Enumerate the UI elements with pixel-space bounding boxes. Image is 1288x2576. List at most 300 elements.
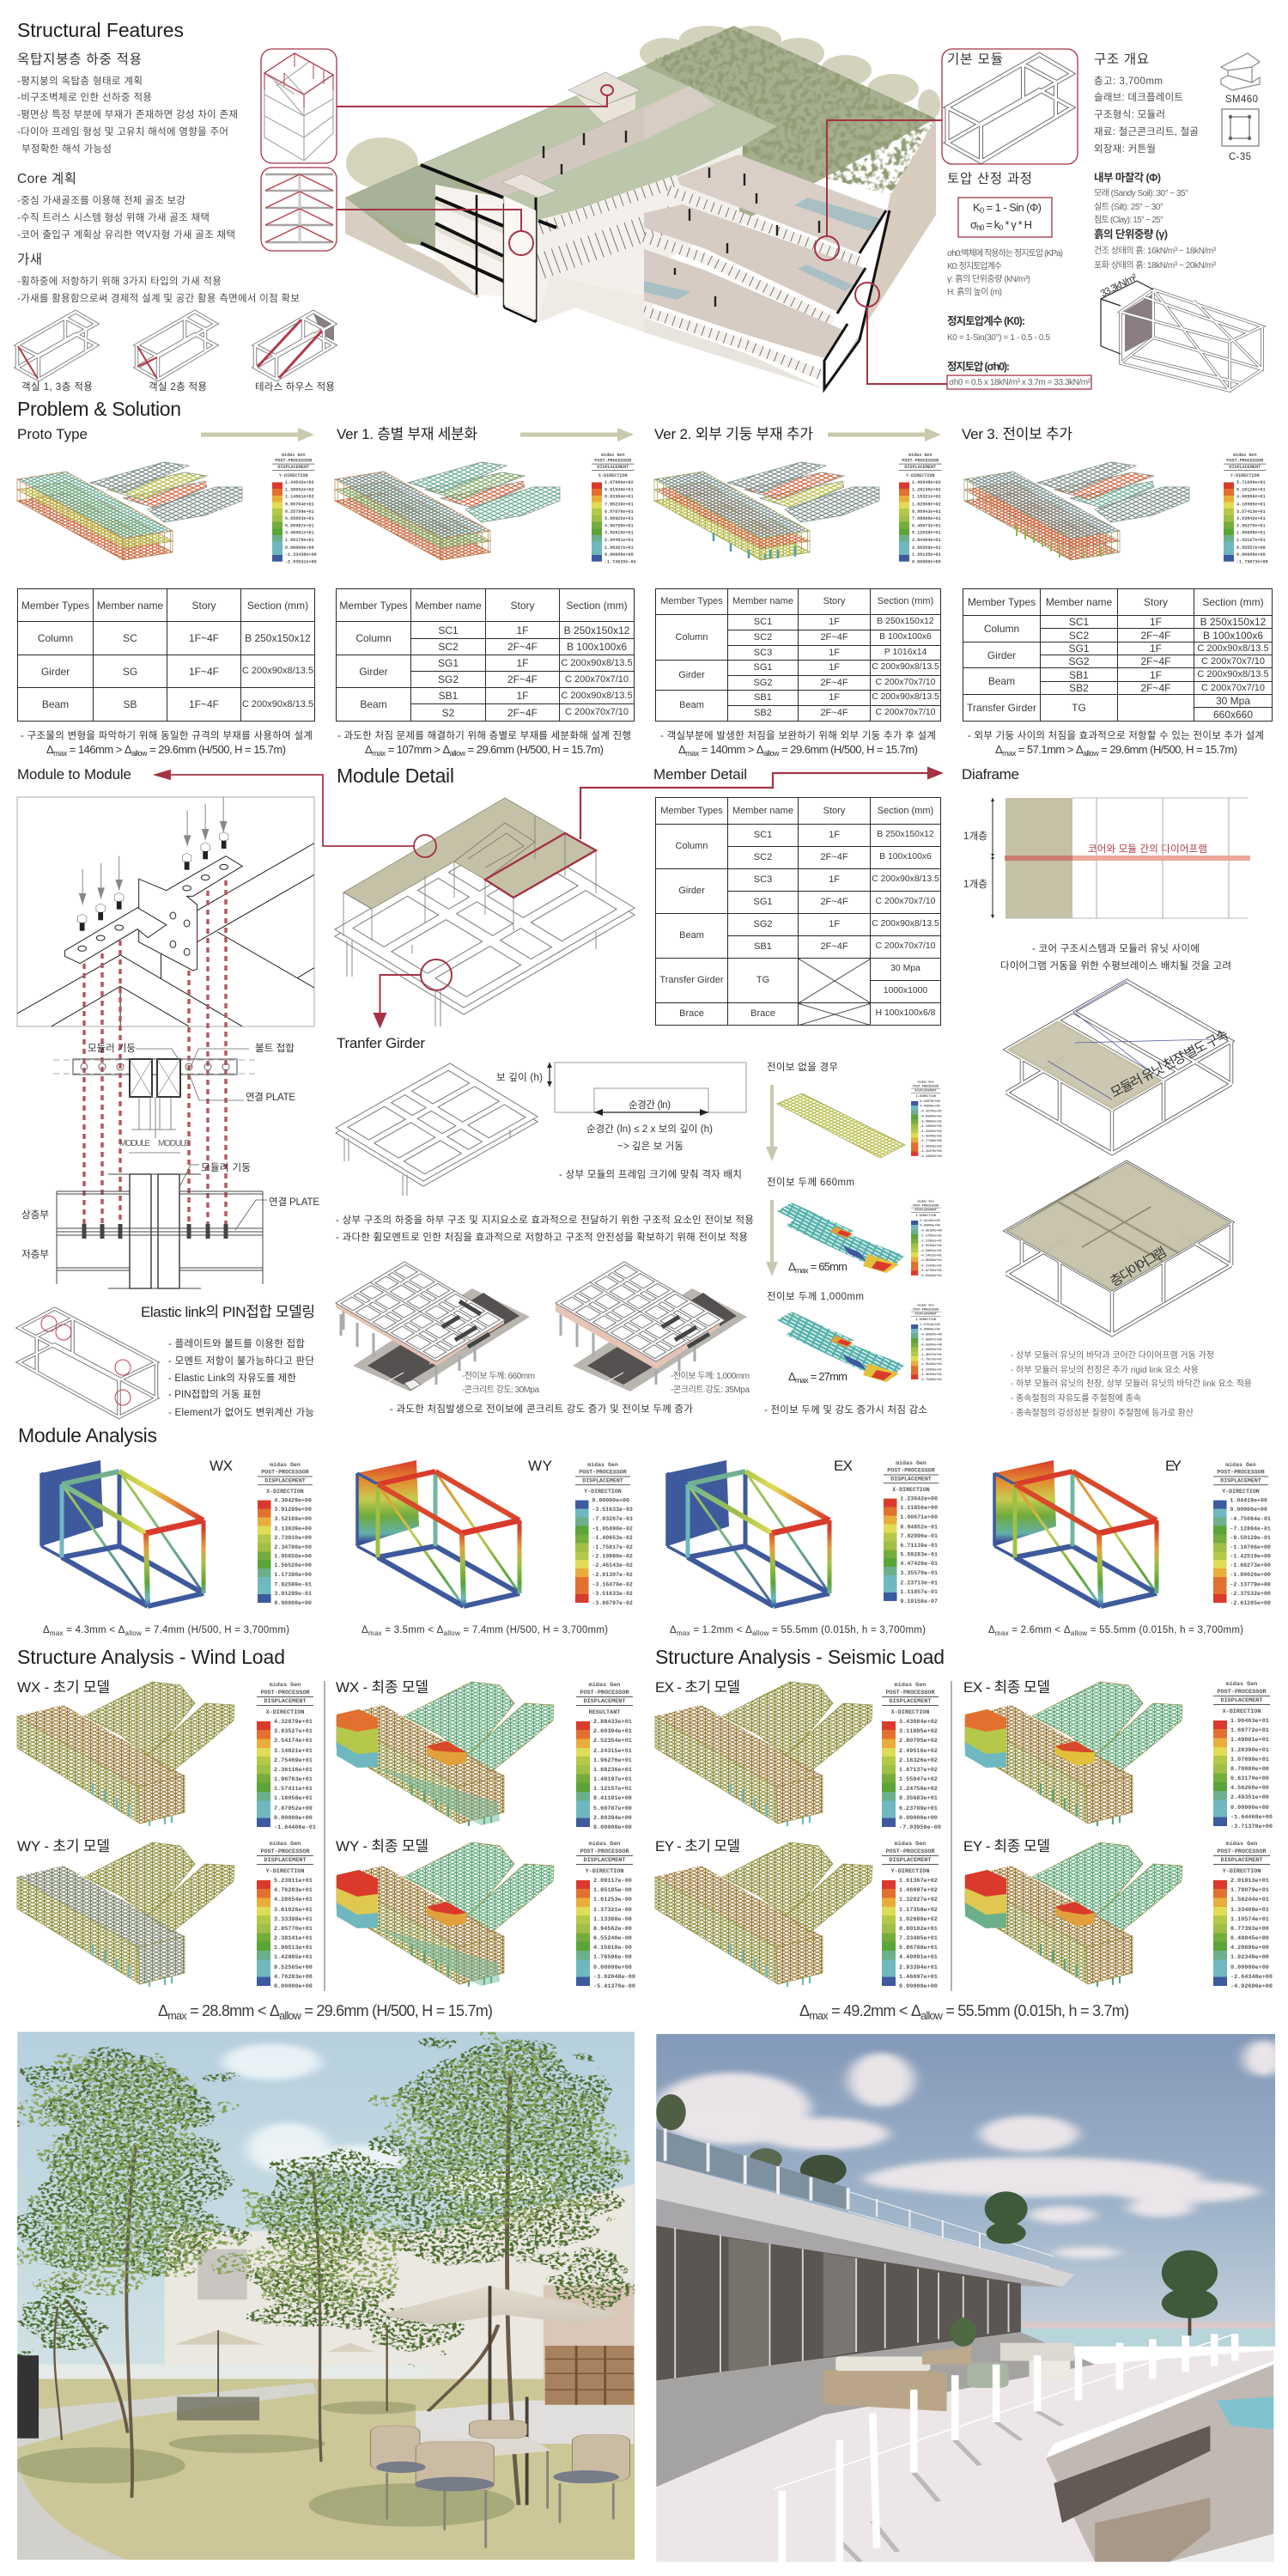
pools: [794, 198, 882, 231]
icon: SM460 H-beam: [1221, 53, 1260, 105]
legend: EY module: -1.66273e+00: [1230, 1563, 1271, 1569]
legend: 660mm girder: -3.04552e+01: [920, 1249, 942, 1252]
hillside: [345, 26, 936, 249]
captions: bracing types: 테라스 하우스 적용: [255, 381, 335, 393]
legend: 660mm girder: -1.17592e+01: [920, 1234, 942, 1238]
table: member detail: Member Types: [660, 806, 723, 816]
table: member detail: SC3: [754, 874, 772, 885]
captions: module analysis: = 7.4mm (H/500, H = 3,700mm): [460, 1625, 608, 1635]
legend: EX initial: 1.24758e+02: [899, 1786, 938, 1793]
captions: module analysis: max: [50, 1629, 64, 1637]
legend: WX initial: 0.00000e+00: [274, 1815, 313, 1822]
table note: version 2: max: [685, 749, 700, 758]
panel: transfer girder analysis: 전이보 두께 660mm: [767, 1177, 854, 1188]
legend: version 1: 2.94461e+01: [605, 538, 634, 543]
table: proto type members: Column: [38, 632, 73, 644]
section: design versions headings and arrows: Proto Type: [17, 426, 88, 442]
table: version 1 members: Girder: [359, 665, 388, 677]
table: version 3 members: 30 Mpa: [1216, 695, 1250, 707]
legend: EX module: 3.35570e-01: [900, 1570, 938, 1577]
legend: 1000mm girder: -9.55394e+00: [920, 1343, 942, 1347]
legend: version 1: midas Gen: [601, 453, 625, 458]
legend: EY initial: 4.40091e+01: [899, 1954, 938, 1961]
heading: transfer girder: Tranfer Girder: [337, 1035, 425, 1051]
table: proto type members: SG: [123, 665, 137, 677]
text block: rooftop load: -평면상 특정 부분에 부재가 존재하면 강성 차이 존재: [17, 108, 238, 120]
legend: EY final: 1.10574e+01: [1230, 1916, 1269, 1923]
legend: version 2: 1.28135e+02: [912, 488, 941, 493]
callout lines: [337, 85, 947, 384]
heading: Diaframe: Diaframe: [962, 766, 1019, 783]
arrow: to member detail and diaframe: [580, 768, 941, 839]
arrow: to transfer girder: [374, 959, 452, 1026]
model: EX initial: [655, 1682, 872, 1826]
table: version 2 members: 1F: [829, 662, 840, 673]
legend: EX module: 8.94852e-01: [900, 1524, 938, 1531]
legend: 660mm girder: Z-DIRECTION: [915, 1215, 936, 1218]
plan detail: plate connection: 볼트 접합: [255, 1043, 295, 1054]
text block: diaphragm assumptions: - 종속절점의 강성성분 질량이 주절점에 등가로 환산: [1011, 1407, 1194, 1418]
legend: WX module: 7.82599e-01: [274, 1581, 312, 1588]
table: proto type members: B 250x150x12: [245, 632, 311, 644]
window bands: [541, 180, 860, 266]
table: proto type members: Section (mm): [247, 600, 308, 612]
legend: EY initial: 5.86788e+01: [899, 1945, 938, 1952]
legend: version 2: midas Gen: [908, 453, 933, 458]
legend: EX module: 6.71139e-01: [900, 1543, 938, 1550]
legend: no transfer girder: 8.46079e+00: [920, 1099, 940, 1104]
captions: bracing types: 객실 1, 3층 적용: [21, 381, 93, 393]
legend: 1000mm girder: -2.45394e+01: [920, 1373, 942, 1377]
legend: WY final: DISPLACEMENT: [584, 1857, 625, 1864]
legend: 660mm girder: [911, 1200, 942, 1277]
table: version 1 members: SC2: [438, 641, 459, 653]
frame model: EY: [994, 1460, 1157, 1606]
table: member detail: SB1: [754, 941, 772, 952]
legend: EX module: POST-PROCESSOR: [887, 1468, 935, 1474]
legend: EX initial: X-DIRECTION: [891, 1709, 929, 1716]
text block: rooftop load: -평지붕의 옥탑층 형태로 계획: [17, 76, 143, 87]
terrace 2: [644, 204, 864, 312]
separators: [325, 1681, 951, 1991]
plan detail: plate connection: MODULE: [119, 1139, 150, 1148]
legend: EY final: -2.64348e+00: [1230, 1974, 1273, 1981]
legend: version 1: 8.83304e+01: [605, 495, 634, 500]
table: member detail: B 250x150x12: [877, 830, 934, 839]
captions: module analysis: allow: [125, 1629, 142, 1637]
panel: core bracing detail: [261, 167, 337, 251]
table: version 3 members: C 200x90x8/13.5: [1197, 669, 1269, 679]
legend: EY initial: 8.80182e+01: [899, 1926, 938, 1933]
drawing: transfer girder over road 660mm: [336, 1262, 539, 1395]
legend: EY initial: 1.61367e+02: [899, 1878, 938, 1885]
text block: rooftop load: [17, 52, 238, 155]
table: member detail: H 100x100x6/8: [876, 1008, 935, 1018]
legend: EX initial: [882, 1682, 941, 1831]
legend: version 1: 1.96307e+01: [605, 545, 634, 551]
table: version 3 members: SG2: [1068, 655, 1089, 667]
plan detail: plate connection: MODULE: [158, 1139, 190, 1148]
legend: EY initial: Y-DIRECTION: [891, 1868, 929, 1875]
case labels: WX: [210, 1458, 233, 1474]
legend: EY module: -2.37532e+00: [1230, 1591, 1271, 1598]
table note: version 3: Δ: [995, 743, 1003, 756]
roof notch terrace: [644, 86, 716, 140]
table: version 2 members: 2F~4F: [820, 708, 848, 718]
legend: WX initial: 2.75469e+01: [274, 1757, 313, 1764]
legend: no transfer girder: -1.55498e+02: [920, 1135, 942, 1138]
FEA model: version 3: [964, 462, 1189, 560]
drawing: transfer girder grid: [336, 1063, 538, 1196]
legend: version 2: 6.40673e+01: [912, 524, 941, 529]
legend: EY initial: 1.32027e+02: [899, 1897, 938, 1903]
text block: rooftop load: 부정확한 해석 가능성: [21, 143, 112, 155]
legend: EX final: X-DIRECTION: [1223, 1708, 1261, 1715]
table: version 1 members: [336, 588, 635, 722]
table: version 3 members: SC2: [1069, 629, 1089, 641]
legend: WX final: DISPLACEMENT: [584, 1698, 625, 1705]
table note: version 2: - 객실부분에 발생한 처짐을 보완하기 위해 외부 기둥 추가 후 설계: [660, 729, 936, 741]
table: version 3 members: 2F~4F: [1140, 682, 1171, 694]
heading: seismic load: Structure Analysis - Seismic Load: [655, 1646, 945, 1668]
icon: C-35 column: C-35: [1229, 152, 1251, 162]
legend: no transfer girder: -1.33203e+02: [920, 1130, 942, 1133]
model: WY final: [337, 1842, 554, 1987]
table note: proto type: - 구조물의 변형을 파악하기 위해 동일한 규격의 부재를 사용하여 설계: [21, 729, 313, 741]
legend: proto type: -2.93541e+00: [285, 559, 317, 564]
case labels: EX: [834, 1458, 853, 1474]
text block: elastic link notes: - 모멘트 저항이 불가능하다고 판단: [168, 1355, 314, 1367]
legend: EX final: 1.49081e+01: [1230, 1737, 1269, 1744]
table: version 1 members: 1F: [516, 657, 529, 669]
table: version 1 members: 2F~4F: [507, 641, 538, 653]
captions: module analysis: allow: [444, 1629, 460, 1637]
text block: structure overview: 층고: 3,700mm: [1094, 76, 1163, 87]
table: member detail: C 200x90x8/13.5: [872, 919, 939, 929]
legend: EY module: [1213, 1462, 1271, 1607]
table: member detail: Brace: [750, 1008, 775, 1019]
panel: basic module: [942, 49, 1078, 164]
section: design versions headings and arrows: [17, 426, 1072, 442]
legend: WX initial: 1.57411e+01: [274, 1786, 313, 1793]
table: proto type members: Member Types: [21, 600, 89, 612]
table: version 3 members: 660x660: [1213, 708, 1253, 720]
text block: friction angle: 건조 상태의 흙: 16kN/m³ ~ 18kN/m³: [1094, 245, 1217, 256]
table: proto type members: SB: [123, 698, 137, 710]
legend: EY final: 1.56244e+01: [1230, 1897, 1269, 1903]
table: version 3 members: SB1: [1069, 668, 1089, 680]
model titles: WY - 최종 모델: [336, 1838, 428, 1854]
table: version 1 members: C 200x70x7/10: [565, 707, 629, 717]
section: design versions headings and arrows: Ver 1. 층별 부재 세분화: [337, 426, 477, 442]
legend: version 1: 3.92615e+01: [605, 531, 634, 536]
legend: WX initial: 3.93527e+01: [274, 1728, 313, 1735]
legend: 660mm girder: -6.50184e+01: [920, 1274, 942, 1277]
captions: module analysis: allow: [752, 1629, 769, 1637]
table note: proto type: Δ: [46, 743, 54, 756]
legend: proto type: [272, 453, 317, 564]
legend: WY initial: POST-PROCESSOR: [260, 1848, 310, 1855]
photo: rooftop terrace render: [654, 2034, 1285, 2562]
legend: EY module: 0.00000e+00: [1230, 1507, 1267, 1513]
legend: version 1: X-DIRECTION: [598, 473, 628, 478]
legend: no transfer girder: Z-DIRECTION: [915, 1095, 936, 1099]
table note: version 3: - 외부 기둥 사이의 처짐을 효과적으로 저항할 수 있는 전이보 추가 설계: [968, 730, 1264, 741]
formula box: 0: [980, 206, 984, 215]
frame model: EX: [667, 1460, 829, 1606]
legend: WX final: 8.41181e+00: [593, 1795, 632, 1802]
legend: EY final: DISPLACEMENT: [1221, 1857, 1262, 1864]
legend: EY module: midas Gen: [1225, 1462, 1256, 1469]
plan detail: plate connection: 모듈러 기둥: [88, 1043, 136, 1054]
legend: EY initial: [882, 1841, 939, 1990]
right soil: [824, 119, 936, 389]
text block: coefficient: 정지토압 (σh0):: [947, 361, 1010, 373]
text block: rooftop load: -비구조벽체로 인한 선하중 적용: [17, 91, 152, 103]
panel: module to module connection drawing: [17, 797, 314, 1026]
legend: WY final: -5.41370e-00: [593, 1983, 635, 1990]
legend: EY initial: midas Gen: [895, 1841, 926, 1848]
highlighted module: [485, 833, 596, 898]
legend: EX final: 0.00000e+00: [1230, 1805, 1269, 1812]
legend: WX final: 5.60787e+00: [593, 1806, 632, 1812]
text block: friction angle: 점토 (Clay): 15° ~ 25°: [1094, 215, 1163, 225]
table: version 2 members: C 200x90x8/13.5: [872, 662, 939, 672]
legend: proto type: midas Gen: [282, 453, 306, 458]
table: version 2 members: SC3: [754, 648, 772, 658]
legend: WX module: 3.91299e+00: [274, 1507, 312, 1513]
table note: version 1: Δ: [365, 743, 373, 756]
table note: version 2: [660, 729, 936, 758]
model titles: EY - 초기 모델: [655, 1838, 740, 1854]
legend: WX module: 2.34780e+00: [274, 1544, 312, 1551]
legend: WY initial: 5.23911e+01: [274, 1878, 313, 1885]
formula box: K: [973, 201, 981, 214]
case labels: [210, 1458, 1182, 1474]
legend: WY final: 1.13388e-00: [593, 1916, 632, 1923]
text block: rooftop load: -다이아 프레임 형성 및 고유치 해석에 영향을 주어: [17, 126, 228, 137]
table: member detail: 1F: [829, 919, 840, 929]
legend: version 1: 6.87076e+01: [605, 509, 634, 515]
table: version 2 members: C 200x70x7/10: [876, 708, 935, 717]
captions: module analysis: = 55.5mm (0.015h, h = 3,700mm): [769, 1625, 926, 1635]
model: WX final: [337, 1682, 554, 1826]
elevation detail: column connection: 연결 PLATE: [269, 1197, 319, 1208]
table: version 2 members: C 200x90x8/13.5: [872, 692, 939, 702]
legend: WY initial: 0.00000e+00: [274, 1983, 313, 1990]
table note: version 1: = 107mm > Δ: [386, 743, 451, 756]
legend: no transfer girder: -8.68494e+01: [920, 1115, 942, 1118]
legend: proto type: 1.14561e+02: [285, 495, 314, 500]
legend: WX initial: POST-PROCESSOR: [260, 1690, 310, 1696]
text block: formula legend: K0: 정지토압계수: [947, 260, 1002, 271]
table: proto type members: SC: [123, 632, 137, 644]
text block: elastic link notes: - 플레이트와 볼트를 이용한 접합: [168, 1338, 305, 1349]
legend: EX module: 1.00671e+00: [900, 1514, 938, 1521]
table: version 3 members: 1F: [1150, 616, 1162, 628]
legend: WY final: [576, 1841, 635, 1990]
diagram: diaphragm section: [963, 798, 1250, 918]
legend: WY module: -1.05490e-02: [592, 1526, 633, 1532]
table note: version 2: allow: [763, 749, 780, 758]
legend: WX module: 3.91299e-01: [274, 1591, 312, 1598]
caption: wind load: Δ: [158, 2002, 168, 2019]
legend: version 3: 4.66556e+01: [1236, 495, 1266, 500]
legend: version 2: [899, 453, 941, 564]
text block: transfer girder notes: - 과다한 휨모멘트로 인한 처짐을 효과적으로 저항하고 구조적 안전성을 확보하기 위해 전이보 적용: [336, 1231, 748, 1243]
result box: σh0 = 0.5 x 18kN/m³ x 3.7m = 33.3kN/m²: [949, 378, 1091, 387]
legend: version 3: 3.57413e+01: [1236, 509, 1266, 515]
diagram: beam depth: 보 깊이 (h): [496, 1072, 543, 1083]
text block: core plan: -수직 트러스 시스템 형성 위해 가새 골조 채택: [17, 212, 210, 223]
text block: formula legend: σh0:벽체에 작용하는 정지토압 (KPa): [947, 247, 1063, 259]
legend: WY final: 1.85185e-00: [593, 1887, 632, 1894]
captions: module analysis: allow: [1071, 1629, 1087, 1637]
caption: seismic load: = 55.5mm (0.015h, h = 3.7m): [942, 2002, 1129, 2019]
legend: WX final: 2.52354e+01: [593, 1738, 632, 1745]
table: version 1 members: S2: [442, 706, 454, 718]
table: version 1 members: SG1: [438, 657, 459, 669]
legend: version 3: 5.18128e+01: [1236, 488, 1266, 493]
captions: bracing types: [21, 381, 335, 393]
table: version 2 members: SC2: [754, 632, 772, 642]
legend: WX final: 2.80394e+00: [593, 1815, 632, 1822]
legend: WY initial: 1.42885e+01: [274, 1954, 313, 1961]
arrow: to module to module: [155, 770, 436, 857]
legend: EX module: 5.59283e-01: [900, 1552, 938, 1558]
heading: elastic link: Elastic link의 PIN접합 모델링: [141, 1304, 315, 1320]
legend: WX final: 1.68236e+01: [593, 1767, 632, 1774]
section: design versions headings and arrows: Ver 3. 전이보 추가: [962, 426, 1072, 442]
legend: EY module: DISPLACEMENT: [1220, 1477, 1261, 1484]
legend: EX final: midas Gen: [1226, 1681, 1257, 1688]
legend: EY final: Y-DIRECTION: [1223, 1868, 1261, 1875]
legend: EX final: 1.69772e+01: [1230, 1727, 1269, 1734]
legend: EY final: [1213, 1841, 1273, 1990]
table: version 3 members: TG: [1072, 702, 1086, 714]
table: proto type members: C 200x90x8/13.5: [242, 666, 313, 676]
legend: WY module: -3.51633e-02: [592, 1591, 633, 1598]
legend: WX module: DISPLACEMENT: [264, 1477, 306, 1484]
legend: EY module: Y-DIRECTION: [1222, 1489, 1260, 1495]
case labels: WY: [528, 1458, 552, 1474]
table: member detail: 30 Mpa: [890, 964, 920, 973]
table: proto type members: Girder: [41, 665, 70, 677]
legend: 1000mm girder: POST-PROCESSOR: [913, 1308, 939, 1312]
legend: version 3: DISPLACEMENT: [1229, 465, 1261, 470]
table: version 2 members: Section (mm): [878, 596, 933, 606]
table: version 2 members: SG1: [753, 662, 773, 673]
model titles: WY - 초기 모델: [17, 1838, 110, 1854]
text block: elastic link notes: [168, 1338, 314, 1418]
legend: WX final: [576, 1682, 633, 1831]
legend: 1000mm girder: 0.00000e+00: [920, 1328, 940, 1331]
captions: module analysis: = 1.2mm < Δ: [690, 1625, 752, 1635]
text block: formula legend: H: 흙의 높이 (m): [947, 286, 1002, 297]
captions: module analysis: Δ: [43, 1625, 50, 1635]
legend: version 2: 3.84404e+01: [912, 538, 941, 543]
text block: coefficient: K0 = 1-Sin(30°) = 1 - 0.5 - 0.5: [947, 333, 1050, 343]
legend: proto type: 6.65893e+01: [285, 516, 314, 521]
icon: bracing type 2: [137, 312, 216, 380]
legend: proto type: 5.05987e+01: [285, 524, 314, 529]
legend: EX initial: 2.49516e+02: [899, 1748, 938, 1755]
icon: module under earth pressure: [1099, 272, 1262, 391]
case labels: EY: [1165, 1458, 1182, 1474]
table: member detail: SC1: [754, 830, 772, 840]
text block: rooftop load: 옥탑지붕층 하중 적용: [17, 52, 142, 67]
legend: WY final: POST-PROCESSOR: [580, 1848, 629, 1855]
legend: no transfer girder: -2.21970e+02: [920, 1149, 942, 1154]
table: member detail: C 200x70x7/10: [876, 897, 935, 906]
table: proto type members: 1F~4F: [189, 698, 219, 710]
legend: no transfer girder: -8.88554e+01: [920, 1120, 942, 1124]
captions: module analysis: = 3.5mm < Δ: [382, 1625, 444, 1635]
table: proto type members: Story: [191, 600, 216, 612]
table: member detail: Column: [676, 841, 708, 851]
legend: EY initial: POST-PROCESSOR: [885, 1848, 935, 1855]
legend: EX module: midas Gen: [896, 1460, 927, 1467]
legend: EY module: -1.90026e+00: [1230, 1572, 1271, 1579]
legend: EX module: 2.23713e-01: [900, 1580, 938, 1586]
legend: WX final: 1.96276e+01: [593, 1757, 632, 1764]
legend: EX initial: 0.00000e+00: [899, 1815, 938, 1822]
formula box: * γ * H: [1003, 218, 1032, 231]
table: proto type members: [17, 588, 315, 722]
legend: version 2: 8.96943e+01: [912, 509, 941, 515]
legend: EX final: 1.28390e+01: [1230, 1747, 1269, 1754]
text block: formula legend: γ: 흙의 단위중량 (kN/m³): [947, 273, 1030, 284]
legend: WX module: POST-PROCESSOR: [261, 1470, 309, 1476]
legend: EX module: 1.23042e+00: [900, 1496, 938, 1502]
text block: elastic link notes: - Element가 없어도 변위계산 가능: [168, 1407, 314, 1418]
formula box: σ: [970, 218, 977, 231]
icon: C-35 column: [1222, 109, 1259, 162]
table note: proto type: = 146mm > Δ: [67, 743, 132, 756]
FEA model: version 2: [654, 462, 879, 560]
plan detail: plate connection: [53, 1043, 295, 1153]
legend: version 2: POST-PROCESSOR: [902, 459, 939, 464]
table: version 2 members: SB1: [754, 692, 772, 703]
legend: version 2: Y-DIRECTION: [906, 473, 935, 478]
table: version 3 members: B 100x100x6: [1203, 629, 1263, 641]
text block: friction angle: 내부 마찰각 (Φ): [1094, 172, 1161, 184]
legend: WY initial: [257, 1841, 313, 1990]
axonometric building: [345, 26, 940, 389]
captions: module analysis: [43, 1625, 1243, 1637]
table note: proto type: [21, 729, 313, 758]
table: version 2 members: Girder: [678, 670, 705, 680]
legend: version 3: 1.96699e+01: [1236, 531, 1266, 536]
table: version 1 members: Member name: [415, 600, 482, 612]
table note: version 3: = 29.6mm (H/500, H = 15.7m): [1098, 743, 1237, 756]
legend: WY final: midas Gen: [589, 1841, 620, 1848]
text block: bracing: -횡하중에 저항하기 위해 3가지 타입의 가새 적용: [17, 275, 222, 287]
legend: WY final: 8.94562e-00: [593, 1926, 632, 1933]
legend: version 1: 7.85230e+01: [605, 502, 634, 507]
table: version 2 members: B 250x150x12: [877, 617, 934, 626]
table: version 3 members: Section (mm): [1202, 596, 1264, 608]
legend: 1000mm girder: -1.70276e+01: [920, 1358, 942, 1361]
table: member detail: 2F~4F: [820, 852, 848, 862]
text block: diaphragm assumptions: - 하부 모듈러 유닛의 천장, 상부 모듈러 유닛의 바닥간 link 요소 적용: [1011, 1378, 1252, 1389]
text block: structure overview: [1094, 52, 1199, 155]
table: member detail: SG1: [753, 897, 773, 907]
legend: EX initial: -7.03959e-00: [899, 1824, 941, 1831]
table: member detail: Member name: [732, 806, 793, 816]
legend: WX module: midas Gen: [270, 1462, 301, 1469]
legend: version 3: 2.50270e+01: [1236, 524, 1266, 529]
